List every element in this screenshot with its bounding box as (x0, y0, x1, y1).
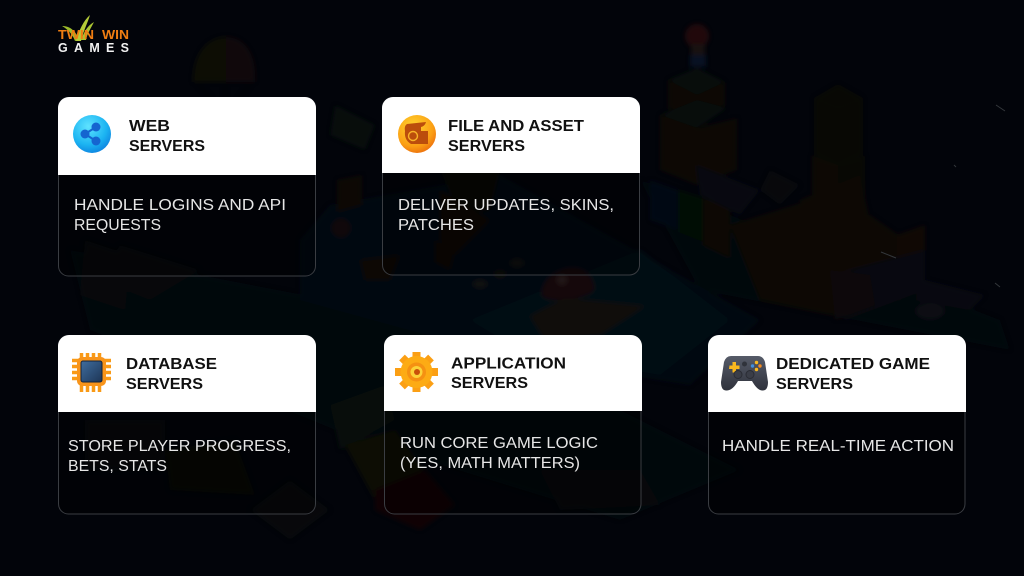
small left blocks (330, 105, 375, 150)
card header (382, 97, 640, 173)
panel: dedicated game servers (708, 335, 966, 514)
green/brick stack (668, 68, 725, 95)
text block: HANDLE REAL-TIME ACTION (722, 438, 954, 455)
card header (384, 335, 642, 411)
heading: SERVERS (126, 376, 203, 393)
heading (129, 118, 205, 155)
heading: WEB (129, 118, 170, 135)
heading: SERVERS (129, 138, 205, 155)
sparks (881, 105, 1005, 287)
text block: DELIVER UPDATES, SKINS, (398, 197, 614, 214)
heading (126, 356, 217, 393)
mushroom (542, 268, 594, 300)
panel: file and asset servers (382, 97, 640, 275)
card header (58, 97, 316, 175)
heading: SERVERS (451, 375, 528, 392)
panel: database servers (58, 335, 316, 514)
panel: application servers (384, 335, 642, 514)
heading: DATABASE (126, 356, 217, 373)
logo: GAMES (58, 41, 129, 55)
heading: FILE AND ASSET (448, 118, 585, 135)
lower blocks (330, 385, 395, 450)
heading: DEDICATED GAME (776, 356, 930, 373)
text block: STORE PLAYER PROGRESS, (68, 438, 291, 455)
heading (448, 118, 585, 155)
icon: gamepad (721, 356, 768, 391)
teal board (300, 175, 760, 385)
text block: HANDLE LOGINS AND API (74, 197, 286, 214)
mario (685, 24, 709, 48)
icon: gear (395, 352, 438, 392)
heading (451, 356, 566, 392)
text block: PATCHES (398, 217, 474, 234)
heading: APPLICATION (451, 356, 566, 372)
icon: chip (72, 353, 111, 392)
road (70, 250, 740, 520)
logo: WIN (102, 27, 129, 42)
card header (708, 335, 966, 412)
logo (58, 15, 129, 55)
text block: BETS, STATS (68, 458, 167, 475)
icon: share network (73, 115, 111, 153)
orange block pile (730, 200, 920, 315)
text block: (YES, MATH MATTERS) (400, 455, 580, 472)
text block: REQUESTS (74, 217, 161, 234)
coloured blocks (650, 180, 678, 230)
text block (398, 197, 614, 234)
heading (776, 356, 930, 393)
icon: scroll coin (398, 115, 436, 153)
text block (400, 435, 598, 472)
parachute (193, 37, 226, 82)
text block (74, 197, 286, 234)
panel: web servers (58, 97, 316, 276)
logo: TWIN (58, 27, 94, 42)
text block: RUN CORE GAME LOGIC (400, 435, 598, 452)
icon: grass (62, 15, 94, 41)
heading: SERVERS (448, 138, 525, 155)
heading: SERVERS (776, 376, 853, 393)
card header (58, 335, 316, 412)
tall brown tower (814, 84, 863, 108)
text block (68, 438, 291, 475)
